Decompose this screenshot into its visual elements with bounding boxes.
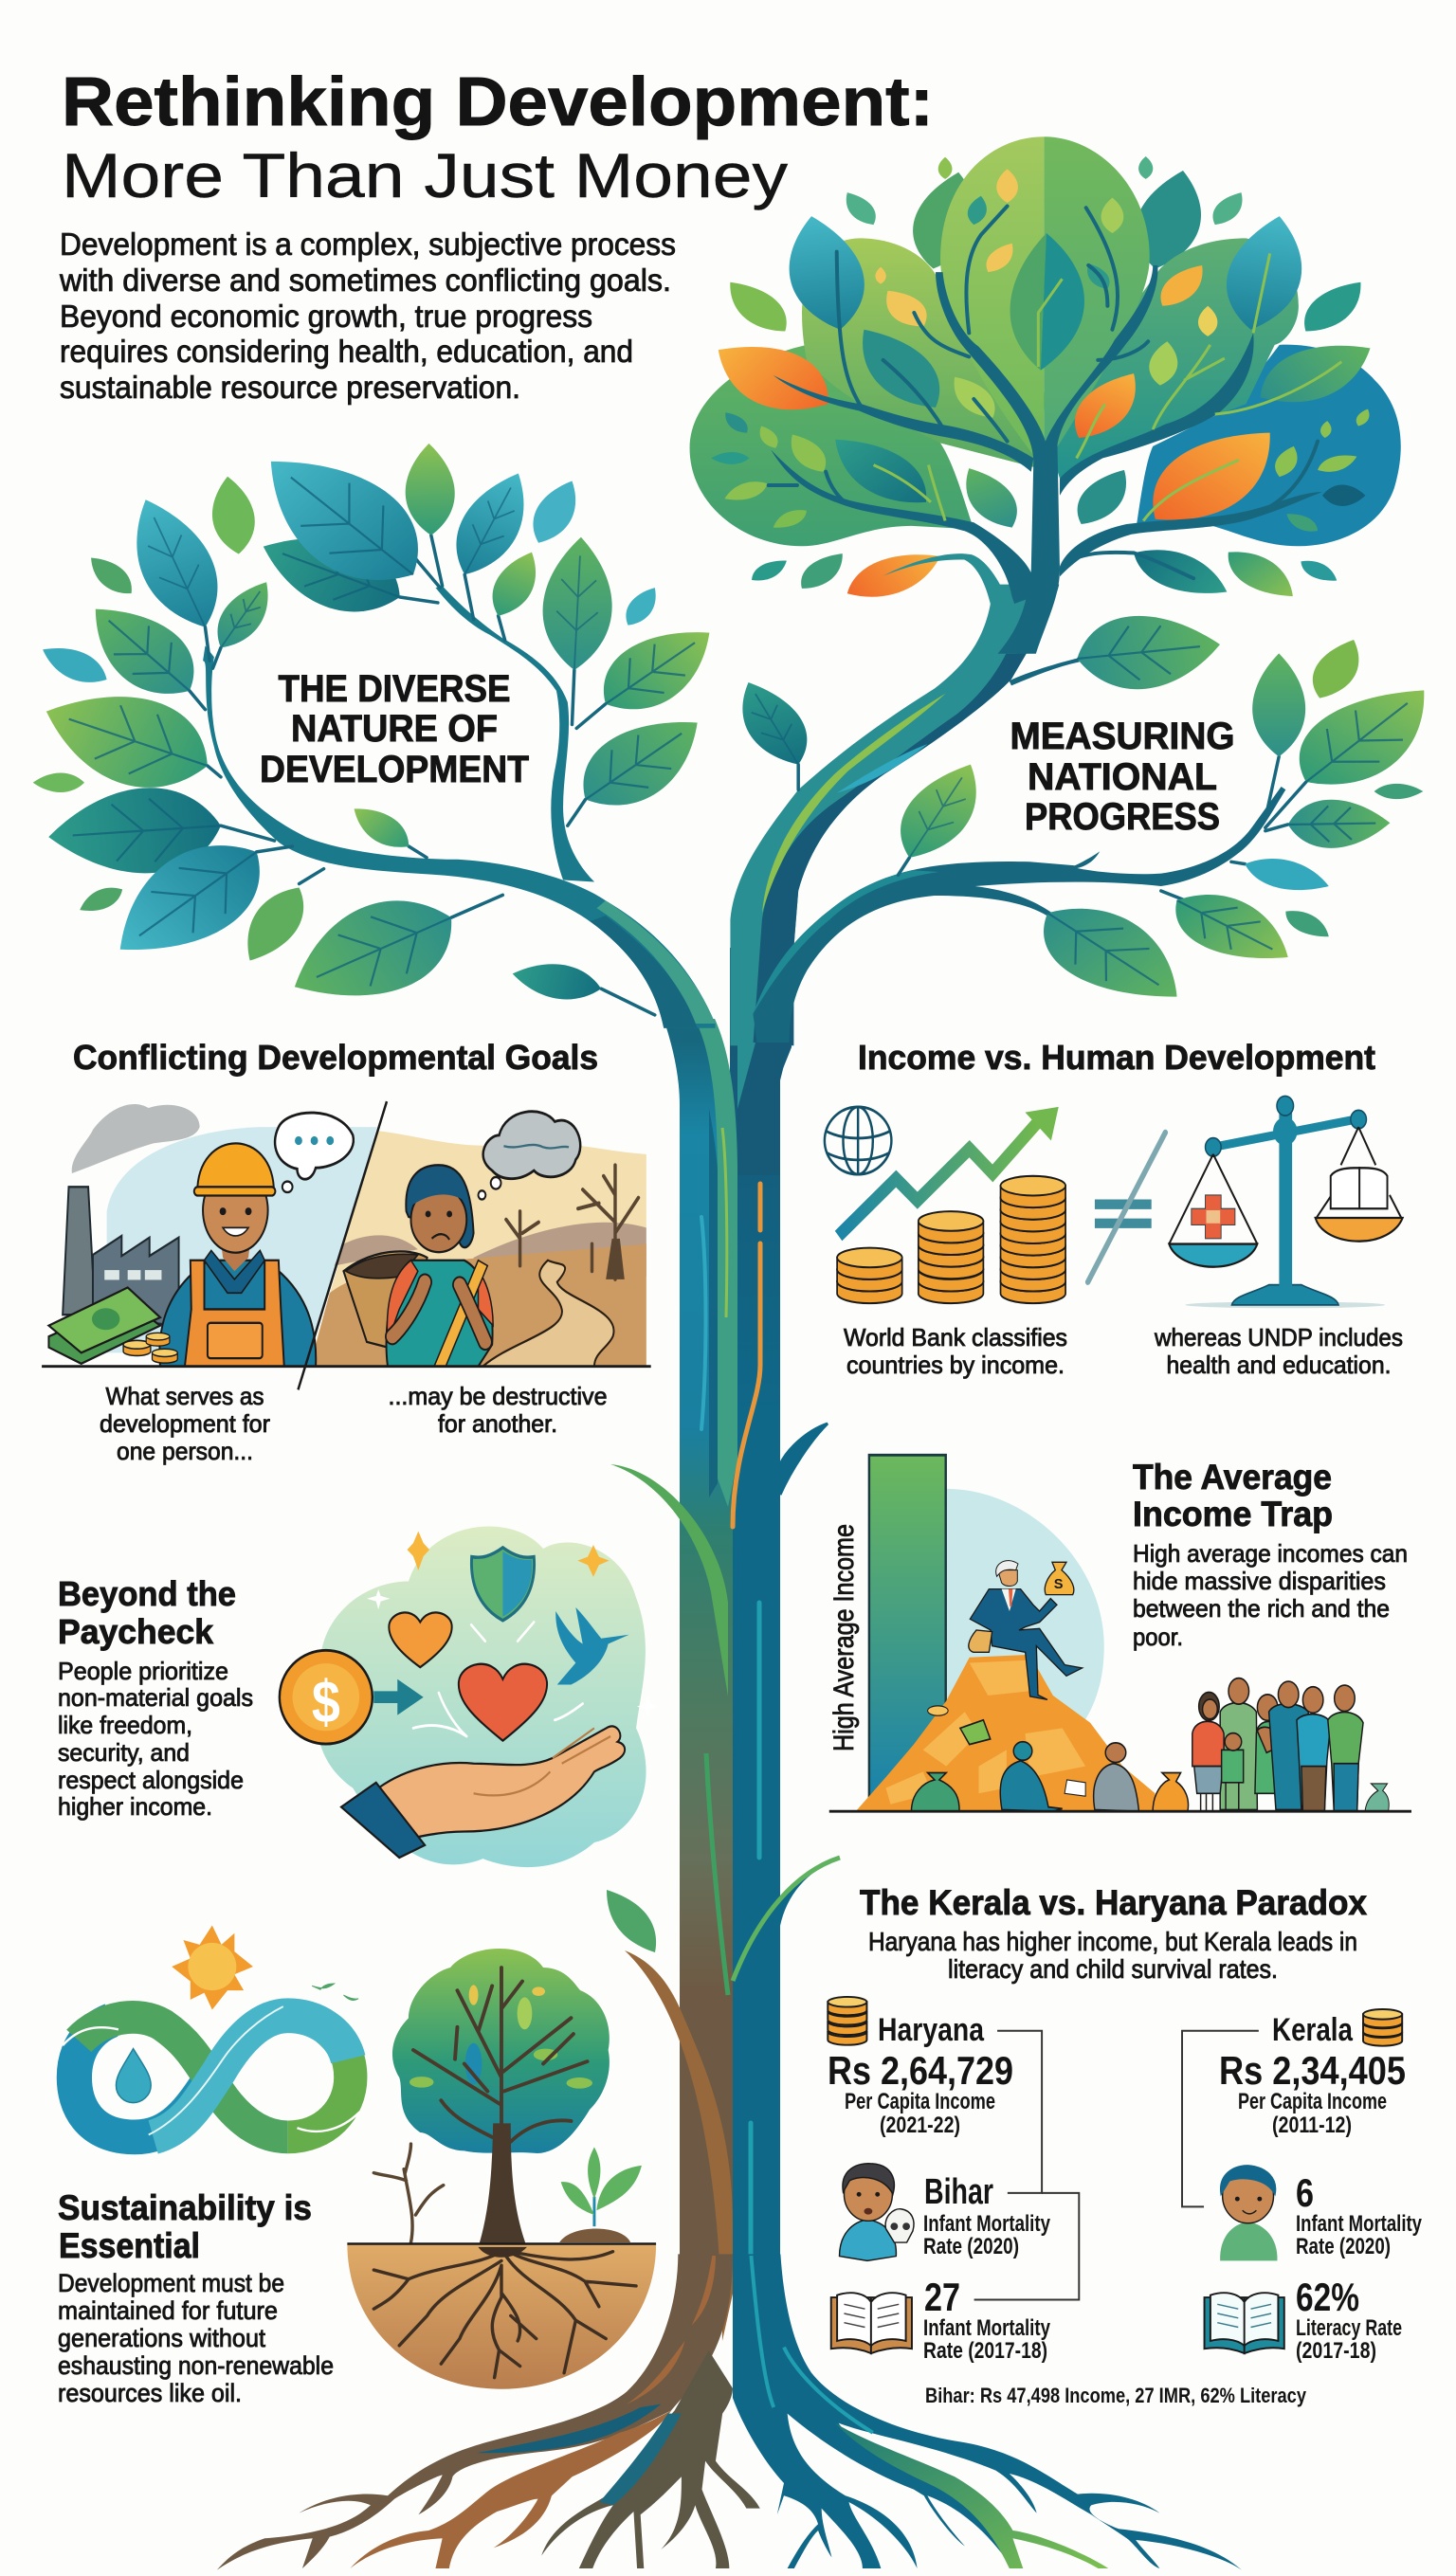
body text: People prioritize: [58, 1657, 228, 1685]
green root: [835, 2423, 1108, 2568]
coin: [280, 1650, 373, 1744]
body text: poor.: [1133, 1623, 1183, 1651]
intro paragraph: Development is a complex, subjective process: [60, 227, 676, 262]
heading: [58, 1574, 236, 1651]
trunk: [607, 948, 840, 2341]
stat: bihar literacy: Rate (2017-18): [923, 2338, 1047, 2364]
group of people: [1192, 1678, 1363, 1811]
illustration: tree, soil, roots and sapling: [347, 1949, 656, 2389]
caption right: ...may be destructive: [389, 1382, 607, 1410]
heading: Sustainability is: [58, 2188, 312, 2227]
column: haryana: (2021-22): [880, 2113, 960, 2138]
shield: [471, 1548, 535, 1621]
icon: balance scale with health and education: [1169, 1096, 1403, 1308]
icon: healthy child: [1220, 2166, 1277, 2260]
icon: open book: [831, 2293, 912, 2353]
icon: coins: [828, 1997, 866, 2045]
hand: [378, 1726, 625, 1842]
heading: Beyond the: [58, 1574, 236, 1613]
illustration: sun: [172, 1926, 358, 2009]
heading: Essential: [59, 2226, 200, 2265]
ground line: [829, 1809, 1411, 1814]
farmer woman: [343, 1251, 428, 1352]
intro paragraph: Beyond economic growth, true progress: [60, 299, 592, 334]
column: haryana: [828, 1997, 1013, 2138]
crown foliage: [690, 136, 1401, 654]
sapling: [559, 2229, 630, 2242]
illustration: values above income: $: [312, 1670, 340, 1736]
arrow: [373, 1679, 424, 1715]
poor figures on pile: [1000, 1761, 1063, 1811]
stat: bihar infant mortality: Infant Mortality: [923, 2211, 1051, 2237]
brown root: [217, 2254, 733, 2570]
stat: kerala infant mortality: Infant Mortality: [1296, 2211, 1423, 2237]
factory: [63, 1187, 95, 1315]
panel: conflicting developmental goals: [42, 1038, 651, 1465]
illustration: wealth bar, gold pile and families: [829, 1455, 1411, 1811]
heading: measuring national progress: [1010, 716, 1234, 838]
body text: Development must be: [58, 2269, 284, 2297]
body text: High average incomes can: [1133, 1539, 1408, 1568]
illustration: values above income: [280, 1527, 659, 1867]
footnote: Bihar: Rs 47,498 Income, 27 IMR, 62% Literacy: [925, 2384, 1307, 2407]
heading: The Average: [1133, 1458, 1332, 1497]
caption left: development for: [100, 1409, 270, 1438]
cuff: [341, 1783, 425, 1858]
column: kerala: Per Capita Income: [1238, 2089, 1387, 2114]
body text: [1133, 1539, 1408, 1651]
title: More Than Just Money: [62, 140, 788, 210]
stat: bihar literacy: 27: [924, 2275, 960, 2319]
left branch: [190, 535, 716, 1028]
captions: World Bank classifies: [844, 1323, 1067, 1351]
panel: sustainability is essential: [58, 1926, 656, 2407]
icon: open book: [1205, 2293, 1284, 2353]
captions: countries by income.: [846, 1351, 1065, 1379]
body text: resources like oil.: [58, 2379, 242, 2407]
orange-brown root: [350, 2410, 671, 2568]
illustration: infinity loop and water drop: [63, 2006, 360, 2137]
heading: Income Trap: [1133, 1495, 1333, 1533]
column: kerala: [1219, 2009, 1406, 2138]
smoke: [72, 1104, 200, 1173]
sparkles: [408, 1532, 610, 1577]
heading: the diverse nature of development: NATURE OF: [291, 708, 498, 750]
stat: bihar literacy: Infant Mortality: [923, 2315, 1051, 2341]
captions: health and education.: [1166, 1351, 1392, 1379]
body text: [58, 2269, 334, 2407]
speech bubble: [275, 1113, 354, 1179]
title: Rethinking Development:: [62, 64, 934, 140]
roots: [217, 2254, 1242, 2570]
stat: kerala infant mortality: 6: [1296, 2170, 1314, 2215]
captions: whereas UNDP includes: [1154, 1323, 1403, 1351]
stat: kerala infant mortality: Rate (2020): [1296, 2234, 1391, 2259]
column: haryana: Haryana: [878, 2012, 985, 2048]
stat: kerala literacy: 62%: [1296, 2275, 1359, 2319]
heading: measuring national progress: MEASURING: [1010, 716, 1234, 757]
caption right: [389, 1382, 607, 1438]
body text: security, and: [58, 1738, 190, 1767]
illustration: worker and drought: [42, 1101, 651, 1389]
illustration: rich man on the pile: [969, 1561, 1083, 1699]
main stem and right branch: [730, 585, 1306, 1175]
stat: bihar infant mortality: Bihar: [924, 2172, 993, 2212]
body text: eshausting non-renewable: [58, 2351, 334, 2380]
intro paragraph: requires considering health, education, and: [60, 334, 633, 369]
subtitle: Haryana has higher income, but Kerala leads in: [868, 1927, 1357, 1956]
stat: bihar infant mortality: Rate (2020): [923, 2234, 1019, 2259]
heading: the diverse nature of development: DEVELOPMENT: [260, 749, 529, 790]
intro paragraph: [59, 227, 676, 405]
panel: the average income trap: [828, 1455, 1411, 1811]
stat: kerala literacy: Literacy Rate: [1296, 2315, 1402, 2341]
worker: [159, 1261, 316, 1367]
centre root: [541, 2350, 760, 2568]
body text: [58, 1657, 253, 1821]
column: kerala: Rs 2,34,405: [1219, 2048, 1406, 2093]
heading: the diverse nature of development: THE DIVERSE: [279, 668, 510, 710]
soil: [347, 2244, 656, 2389]
caption left: one person...: [117, 1437, 253, 1465]
body text: like freedom,: [58, 1711, 192, 1739]
icon: not equal sign: [1088, 1133, 1165, 1282]
body text: hide massive disparities: [1133, 1567, 1386, 1595]
thought cloud: [483, 1112, 580, 1179]
heading: Income vs. Human Development: [858, 1038, 1375, 1077]
connector lines: [974, 2031, 1259, 2299]
body text: higher income.: [58, 1792, 212, 1821]
body text: maintained for future: [58, 2296, 278, 2325]
stat: kerala literacy: [1205, 2275, 1402, 2364]
leaves: left cluster: [27, 429, 733, 1025]
caption left: What serves as: [106, 1382, 264, 1410]
column: haryana: Rs 2,64,729: [828, 2048, 1013, 2093]
heading: the diverse nature of development: [260, 668, 529, 790]
column: kerala: (2011-12): [1272, 2113, 1352, 2138]
subtitle: [868, 1927, 1357, 1984]
gold pile: [856, 1655, 1156, 1811]
captions: [844, 1323, 1403, 1379]
heading: measuring national progress: PROGRESS: [1025, 796, 1220, 838]
caption left: [100, 1382, 270, 1465]
intro paragraph: with diverse and sometimes conflicting goals.: [59, 263, 671, 298]
subtitle: literacy and child survival rates.: [948, 1954, 1278, 1984]
panel: the kerala vs haryana paradox: [828, 1883, 1423, 2407]
stat: bihar literacy: [831, 2275, 1051, 2364]
caption right: for another.: [438, 1409, 557, 1438]
body text: non-material goals: [58, 1683, 253, 1712]
heading: Paycheck: [58, 1612, 214, 1651]
stat: kerala infant mortality: [1220, 2166, 1423, 2260]
teal root: [733, 2254, 1242, 2570]
axis label: High Average Income: [828, 1524, 860, 1751]
stat: bihar infant mortality: [840, 2164, 1051, 2260]
column: kerala: Kerala: [1272, 2012, 1354, 2048]
dead tree: [373, 2144, 444, 2242]
money and coins: [48, 1301, 160, 1364]
heading: [58, 2188, 312, 2265]
intro paragraph: sustainable resource preservation.: [60, 370, 520, 405]
ground line and divider: [42, 1364, 651, 1369]
bird: [555, 1607, 629, 1685]
heading: Conflicting Developmental Goals: [73, 1038, 598, 1077]
column: haryana: Per Capita Income: [845, 2089, 995, 2114]
body text: respect alongside: [58, 1766, 244, 1794]
body text: between the rich and the: [1133, 1594, 1390, 1623]
heading: measuring national progress: NATIONAL: [1028, 756, 1217, 798]
icon: sick child: [840, 2164, 914, 2260]
leaves: right cluster: [723, 608, 1456, 1021]
swirl: [413, 1622, 583, 1736]
panel: beyond the paycheck: [58, 1527, 659, 1867]
icon: coins: [1363, 2009, 1402, 2046]
panel: income vs human development: [825, 1038, 1403, 1379]
crown branches: [883, 553, 1017, 654]
hearts: [389, 1612, 452, 1667]
title: [62, 64, 934, 210]
body text: generations without: [58, 2324, 265, 2352]
heading: The Kerala vs. Haryana Paradox: [860, 1883, 1367, 1922]
illustration: globe, rising arrow and coins: [825, 1107, 1065, 1303]
heading: [1133, 1458, 1333, 1533]
stat: kerala literacy: (2017-18): [1296, 2338, 1376, 2364]
illustration: rich man on the pile: S: [1054, 1577, 1064, 1592]
